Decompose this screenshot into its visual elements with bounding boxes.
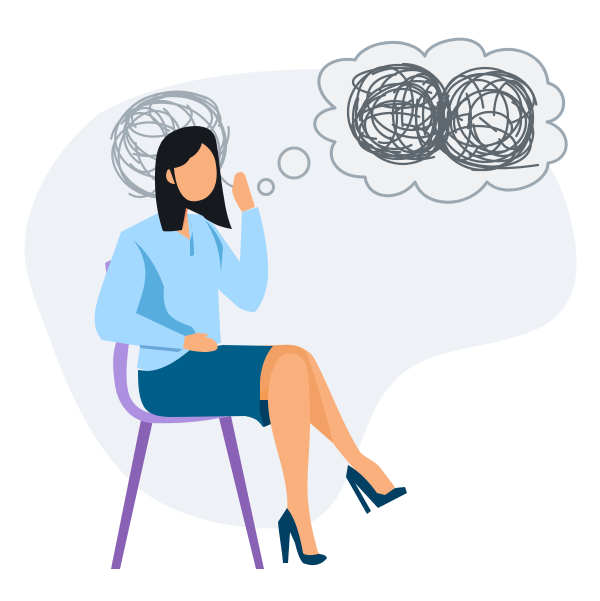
thought bubble: small circle bbox=[258, 180, 274, 194]
chair leg left bbox=[111, 420, 153, 569]
shirt bbox=[95, 207, 268, 371]
hair bbox=[155, 126, 232, 231]
cloud scribble: right knot bbox=[392, 68, 542, 172]
chair seat and back bbox=[105, 260, 228, 423]
neck skin bbox=[175, 190, 190, 240]
back shoe bbox=[346, 465, 407, 514]
knee shadow patch bbox=[260, 382, 271, 400]
shirt body and sleeves bbox=[95, 207, 268, 371]
chair leg right bbox=[219, 416, 264, 569]
skirt dark hem bbox=[259, 400, 271, 427]
background blob bbox=[25, 69, 577, 528]
resting hand bbox=[183, 333, 218, 352]
raised hand bbox=[232, 172, 255, 212]
ear bbox=[166, 169, 175, 184]
skirt bbox=[138, 345, 273, 427]
thought bubble: medium circle bbox=[279, 148, 309, 178]
neck bbox=[175, 188, 194, 256]
side fold shadow bbox=[205, 220, 223, 272]
arm underside shade bbox=[140, 345, 183, 352]
front leg bbox=[268, 353, 327, 565]
back leg bbox=[250, 345, 407, 514]
head scribble bbox=[100, 82, 238, 211]
thigh shadow bbox=[250, 345, 333, 443]
leg bbox=[268, 353, 320, 560]
thought cloud bbox=[315, 39, 566, 202]
front shoe bbox=[278, 508, 327, 565]
chair bbox=[105, 260, 264, 569]
face bbox=[174, 143, 217, 201]
sleeve fold shadow bbox=[133, 240, 197, 336]
neck shadow bbox=[176, 188, 190, 228]
calf and thigh bbox=[260, 345, 395, 497]
cloud scribble: left knot bbox=[347, 63, 458, 166]
collar bbox=[187, 212, 194, 256]
skirt fabric bbox=[138, 345, 273, 427]
